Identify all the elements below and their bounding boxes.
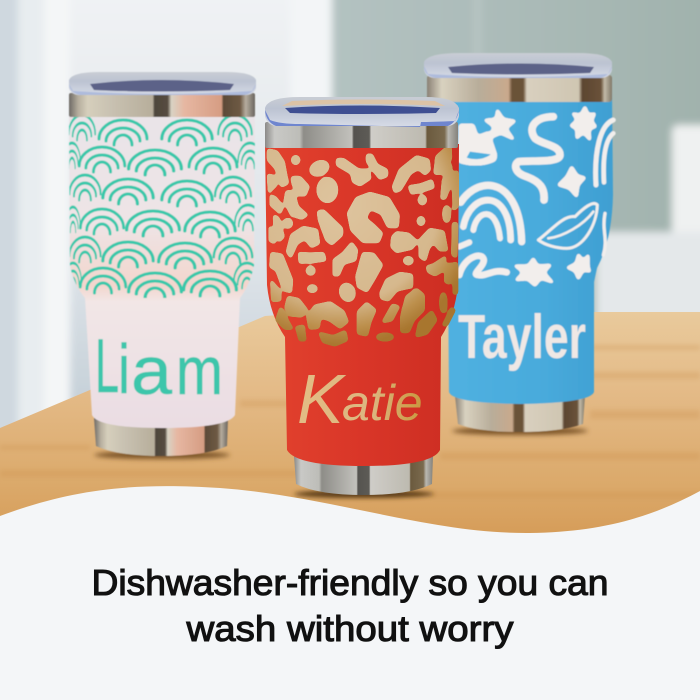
caption (92, 562, 608, 649)
name: Katie: K (297, 360, 347, 438)
wooden table (0, 312, 700, 560)
tumbler: Tayler (blue) (424, 53, 613, 435)
doodle pattern (459, 107, 613, 286)
wave scale pattern (64, 115, 262, 298)
name: Liam: m (176, 333, 223, 409)
caption: Dishwasher-friendly so you can (92, 562, 608, 603)
leopard pattern (268, 145, 457, 345)
white wave panel (0, 486, 700, 700)
name: Katie: atie (342, 375, 423, 431)
tumbler: Katie (red) (265, 97, 459, 498)
name: Tayler: Tayler (458, 303, 586, 372)
name: Liam: i (118, 330, 130, 408)
name: Liam (95, 324, 223, 409)
caption: wash without worry (185, 608, 513, 649)
name: Liam: L (95, 324, 119, 409)
name: Liam: a (131, 333, 172, 409)
background: room with curtains (0, 0, 700, 460)
tumbler: Liam (white) (64, 72, 262, 459)
